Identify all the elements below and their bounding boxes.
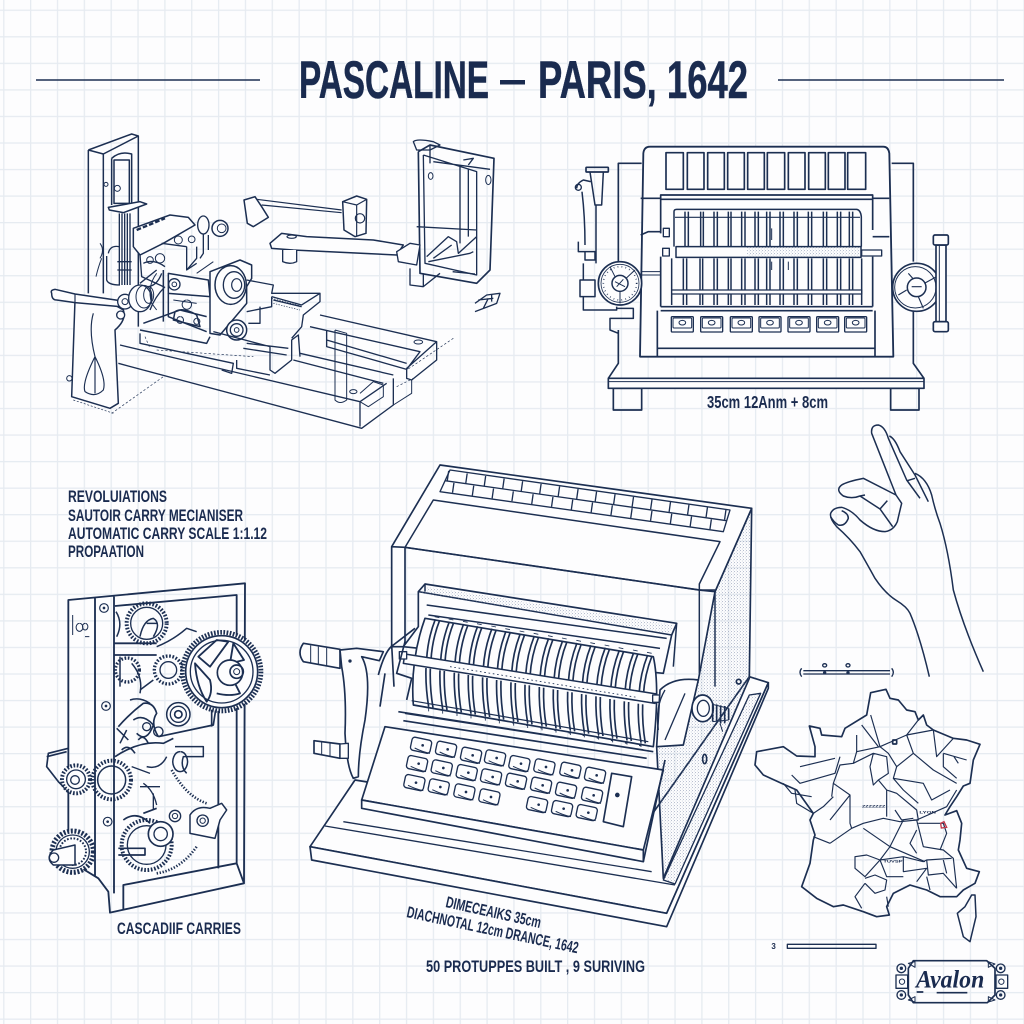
upper housing and knob [133,215,228,310]
title [299,51,748,110]
Paris marker [893,740,897,744]
dimension label: 35cm 12Anm + 8cm [707,392,828,412]
large gear [182,632,261,711]
left lever and dial [575,167,642,333]
icon: hand [830,425,983,677]
drum window [641,195,889,357]
scale bar bottom [771,942,876,951]
title: PASCALINE [299,51,489,110]
key row [671,317,867,332]
crank handle [51,285,154,413]
panel: exploded mechanism drawing [51,134,500,428]
map labels: TUVSP [883,860,904,864]
base rails [112,315,453,428]
scale bar top [800,664,893,677]
text block: dimensions rotated: DIMECEAIKS 35cm [444,894,543,932]
scale bar bottom: 3 [771,942,776,951]
panel: map of France [755,664,1008,1003]
map labels: ZZZZZZZ [862,804,886,808]
outer gears [47,748,93,872]
caption: cascading carries: CASCADIIF CARRIES [117,919,241,938]
logo: Avalon [896,961,1008,1003]
base plate [310,677,768,927]
logo: Avalon: Avalon [914,965,984,993]
frame [68,583,245,913]
panel: gear train [47,583,261,913]
map labels: LYON [919,811,937,815]
caption: prototypes: 50 PROTUPPES BUILT , 9 SURIVING [426,957,645,976]
interior gears [92,603,227,873]
machine body [640,147,893,357]
text block: dimensions rotated [405,894,580,957]
map labels [862,804,937,864]
upper right arm [244,196,403,263]
key panel [362,712,665,862]
side plates and base [608,163,924,410]
crank [300,628,415,778]
text block: carry mechanism notes: SAUTOIR CARRY MECIANISER [68,506,243,525]
top key strip [440,470,730,532]
drum housing [403,584,677,673]
Corsica [957,895,976,942]
title: PARIS, 1642 [538,51,748,110]
panel: front elevation [575,147,948,410]
top windows [666,153,866,189]
text block: carry mechanism notes: PROPAATION [68,542,144,561]
panel: main pascaline machine [300,465,768,927]
side panel stippled [657,508,752,878]
tower and slot [88,134,147,327]
right bracket and screw [657,679,729,747]
region borders [783,715,967,908]
drum dials [412,617,657,747]
text block: dimensions rotated: DIACHNOTAL 12cm DRANCE, 1642 [405,904,580,957]
France outline [755,689,980,917]
text block: carry mechanism notes: REVOLUIATIONS [68,487,167,506]
text block: carry mechanism notes: AUTOMATIC CARRY SCALE 1:1.12 [68,524,267,543]
right dial and lever [893,235,948,332]
gear block and pulleys [140,260,320,355]
text block: carry mechanism notes [68,487,267,561]
upper right frame [397,140,500,312]
upper housing [392,465,752,764]
cross bar [399,652,662,703]
